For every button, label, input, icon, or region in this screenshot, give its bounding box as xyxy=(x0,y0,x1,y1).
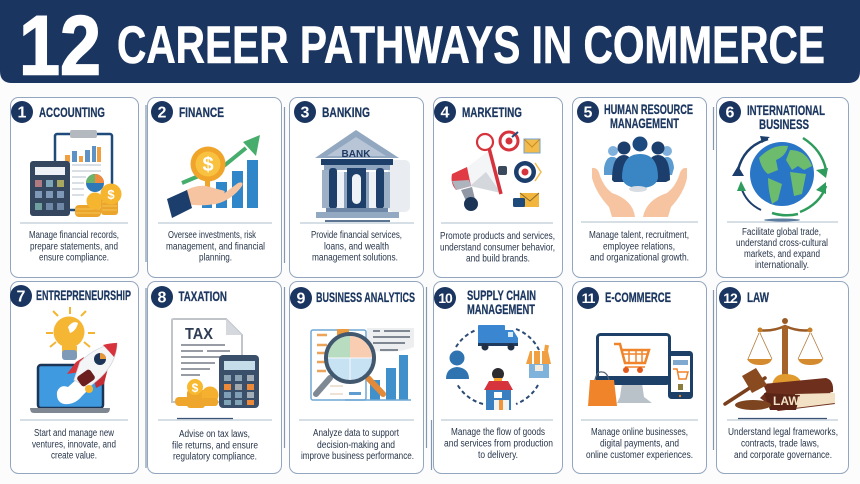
description: international business xyxy=(736,227,828,271)
description: finance: Oversee investments, risk xyxy=(168,230,257,241)
panel: finance xyxy=(148,98,282,278)
heading: supply chain management: MANAGEMENT xyxy=(467,302,535,317)
icon: tax form, calculator and coins: $ xyxy=(192,381,199,395)
description: law xyxy=(728,427,838,461)
panel: human resource management: 5 xyxy=(584,104,593,122)
panel: accounting: 1 xyxy=(18,104,27,122)
panel: taxation: 8 xyxy=(158,290,167,306)
title banner xyxy=(0,0,860,92)
description: banking: management solutions. xyxy=(312,252,398,264)
description: taxation: file returns, and ensure xyxy=(172,440,258,452)
panel: supply chain management xyxy=(434,282,562,474)
description: human resource management: Manage talent, recruitment, xyxy=(589,230,689,241)
description: marketing xyxy=(440,231,555,264)
panel: marketing: 4 xyxy=(441,104,450,122)
description: banking: Provide financial services, xyxy=(311,230,402,241)
description: e-commerce: online customer experiences. xyxy=(586,450,693,461)
description: accounting: Manage financial records, xyxy=(29,230,119,241)
panel: entrepreneurship: 7 xyxy=(17,288,26,306)
description: international business: markets, and expand xyxy=(744,249,820,260)
heading: supply chain management xyxy=(467,288,536,317)
description: human resource management xyxy=(589,230,689,264)
description: marketing: and build brands. xyxy=(466,254,530,264)
panel: finance: 2 xyxy=(158,104,167,122)
heading: law: LAW xyxy=(747,290,769,305)
icon: people in caring hands xyxy=(592,136,687,217)
description: law: and corporate governance. xyxy=(734,450,832,461)
description: international business: understand cross-cultural xyxy=(736,238,828,249)
panel: e-commerce: 11 xyxy=(582,290,596,306)
heading: e-commerce: E-COMMERCE xyxy=(605,290,671,305)
panel: entrepreneurship xyxy=(10,282,138,474)
icon: megaphone with marketing symbols xyxy=(452,132,541,211)
description: supply chain management xyxy=(444,427,553,461)
description: human resource management: and organizational growth. xyxy=(590,252,689,264)
heading: international business xyxy=(747,103,825,132)
title number: 12 xyxy=(19,0,101,92)
description: e-commerce: Manage online businesses, xyxy=(591,427,688,438)
description: accounting: ensure compliance. xyxy=(39,252,109,264)
description: taxation: Advise on tax laws, xyxy=(179,429,250,440)
description: international business: Facilitate global trade, xyxy=(742,227,821,238)
description: marketing: Promote products and services, xyxy=(440,231,555,242)
heading: accounting: ACCOUNTING xyxy=(39,105,105,120)
panel: banking: 3 xyxy=(301,104,310,122)
description: entrepreneurship: create value. xyxy=(51,450,97,462)
description: e-commerce xyxy=(586,427,693,461)
panel: banking xyxy=(290,98,424,278)
description: taxation: regulatory compliance. xyxy=(173,452,257,462)
description: supply chain management: Manage the flow of goods xyxy=(451,427,545,438)
description: international business: internationally. xyxy=(755,260,809,271)
description: accounting xyxy=(29,230,119,264)
heading: international business: INTERNATIONAL xyxy=(747,103,825,118)
heading: human resource management: HUMAN RESOURCE xyxy=(604,102,693,117)
icon: tax form, calculator and coins xyxy=(172,319,259,408)
icon: clipboard, calculator and coins: $ xyxy=(107,187,115,202)
description: accounting: prepare statements, and xyxy=(30,242,118,252)
description: entrepreneurship: Start and manage new xyxy=(34,428,115,439)
description: supply chain management: to delivery. xyxy=(478,450,518,461)
heading: human resource management xyxy=(604,102,693,131)
description: law: Understand legal frameworks, xyxy=(728,427,838,438)
heading: entrepreneurship: ENTREPRENEURSHIP xyxy=(36,288,131,303)
heading: business analytics: BUSINESS ANALYTICS xyxy=(316,290,415,305)
panel: international business xyxy=(716,98,848,278)
panel: accounting xyxy=(10,98,138,278)
heading: marketing: MARKETING xyxy=(462,105,522,120)
heading: human resource management: MANAGEMENT xyxy=(610,116,679,131)
description: taxation xyxy=(172,429,258,462)
description: law: contracts, trade laws, xyxy=(741,438,819,450)
icon: light bulb, rocket and laptop xyxy=(30,307,117,413)
description: banking xyxy=(311,230,402,264)
description: e-commerce: digital payments, and xyxy=(600,438,679,450)
icon: tax form, calculator and coins: TAX xyxy=(185,326,213,343)
icon: coin, hand and growth chart xyxy=(167,135,260,218)
heading: international business: BUSINESS xyxy=(759,117,809,132)
icon: clipboard, calculator and coins xyxy=(30,130,122,217)
heading: taxation: TAXATION xyxy=(178,289,227,304)
description: business analytics: Analyze data to support xyxy=(313,428,399,439)
description: supply chain management: and services from production xyxy=(444,438,553,450)
heading: supply chain management: SUPPLY CHAIN xyxy=(467,288,536,303)
icon: scales, gavel and law books: LAW xyxy=(773,394,800,408)
description: finance: planning. xyxy=(199,252,232,264)
icon: globe with circular arrows xyxy=(732,136,828,222)
description: entrepreneurship: ventures, innovate, and xyxy=(32,440,116,450)
panel: law xyxy=(716,282,848,474)
description: entrepreneurship xyxy=(32,428,116,462)
description: marketing: understand consumer behavior, xyxy=(440,242,555,254)
panel: business analytics xyxy=(290,282,424,474)
description: banking: loans, and wealth xyxy=(324,242,389,252)
description: business analytics xyxy=(301,428,414,462)
icon: scales, gavel and law books xyxy=(725,318,835,411)
description: business analytics: improve business performance. xyxy=(301,451,414,462)
description: finance: management, and financial xyxy=(166,242,265,252)
description: finance xyxy=(166,230,265,264)
description: human resource management: employee relations, xyxy=(603,242,675,252)
icon: bank building xyxy=(315,130,410,222)
icon: supply chain cycle xyxy=(446,325,551,410)
heading: banking: BANKING xyxy=(322,105,370,120)
panel: human resource management xyxy=(572,98,706,278)
icon: bank building: BANK xyxy=(342,149,371,160)
panel: business analytics: 9 xyxy=(297,290,306,308)
panel: law: 12 xyxy=(723,290,738,306)
panel: e-commerce xyxy=(572,282,706,474)
icon: magnifying glass over reports and charts xyxy=(311,328,414,400)
panel: supply chain management: 10 xyxy=(438,290,453,306)
heading: finance: FINANCE xyxy=(179,105,224,120)
panel: marketing xyxy=(434,98,562,278)
icon: online shopping devices xyxy=(588,334,693,406)
panel: international business: 6 xyxy=(726,104,735,122)
icon: coin, hand and growth chart: $ xyxy=(202,154,214,176)
description: business analytics: decision-making and xyxy=(317,440,395,451)
panel: taxation xyxy=(148,282,282,474)
